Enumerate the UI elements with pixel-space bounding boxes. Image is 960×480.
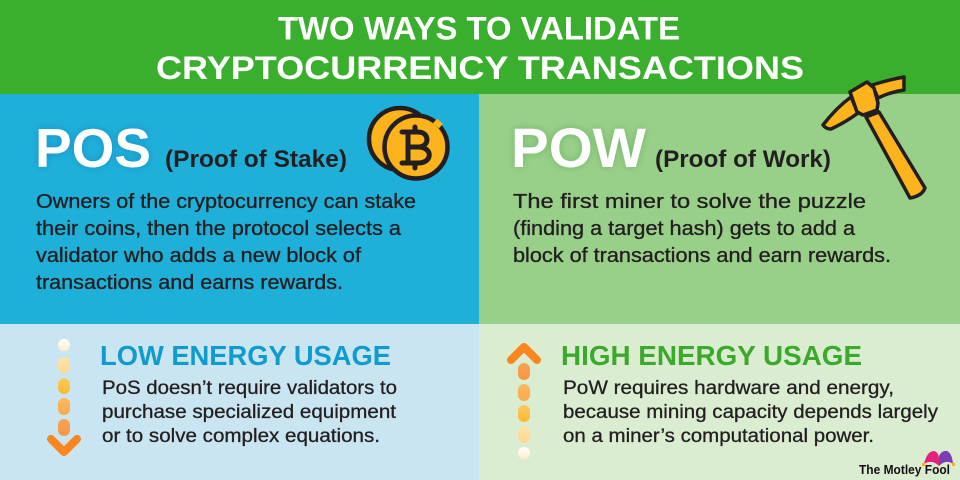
panel: low energy background	[0, 324, 479, 480]
text: low energy description: PoS doesn’t require validators to	[102, 378, 397, 399]
text: proof of work description	[513, 190, 891, 267]
text: proof of stake description: Owners of the cryptocurrency can stake	[36, 190, 416, 213]
text: proof of stake description: transactions and earns rewards.	[36, 271, 343, 294]
heading: POS: POS	[35, 117, 151, 179]
text: high energy description: on a miner’s computational power.	[563, 426, 874, 447]
text: high energy description: because mining capacity depends largely	[563, 402, 939, 423]
heading: POW: POW	[511, 116, 646, 179]
text: proof of stake description: validator who adds a new block of	[36, 244, 361, 267]
text: high energy description: PoW requires hardware and energy,	[563, 378, 894, 399]
panel: proof of stake background	[0, 94, 479, 324]
icon: down arrow	[51, 339, 77, 452]
panel: high energy background	[479, 324, 960, 480]
text: proof of work description: block of transactions and earn rewards.	[513, 244, 891, 267]
icon: pickaxe	[823, 77, 925, 198]
text: proof of work description: The first miner to solve the puzzle	[513, 190, 866, 213]
text: proof of work description: (finding a target hash) gets to add a	[513, 217, 856, 240]
heading: low energy usage: LOW ENERGY USAGE	[100, 340, 391, 371]
subheading: proof of stake: (Proof of Stake)	[165, 146, 347, 173]
title	[156, 10, 804, 86]
title: TWO WAYS TO VALIDATE	[278, 10, 680, 46]
icon: bitcoin coins	[369, 108, 448, 178]
icon: up arrow	[511, 347, 537, 459]
text: high energy description	[563, 378, 939, 447]
header banner	[0, 0, 960, 94]
title: CRYPTOCURRENCY TRANSACTIONS	[156, 50, 804, 86]
subheading: proof of work: (Proof of Work)	[655, 146, 831, 173]
logo: The Motley Fool	[859, 451, 955, 477]
logo: The Motley Fool: The Motley Fool	[859, 463, 950, 477]
heading: high energy usage: HIGH ENERGY USAGE	[561, 340, 862, 371]
text: low energy description: purchase specialized equipment	[102, 402, 397, 423]
text: proof of stake description	[36, 190, 416, 294]
text: low energy description: or to solve complex equations.	[102, 426, 380, 447]
text: low energy description	[102, 378, 397, 447]
text: proof of stake description: their coins, then the protocol selects a	[36, 217, 402, 240]
panel: proof of work background	[479, 94, 960, 324]
